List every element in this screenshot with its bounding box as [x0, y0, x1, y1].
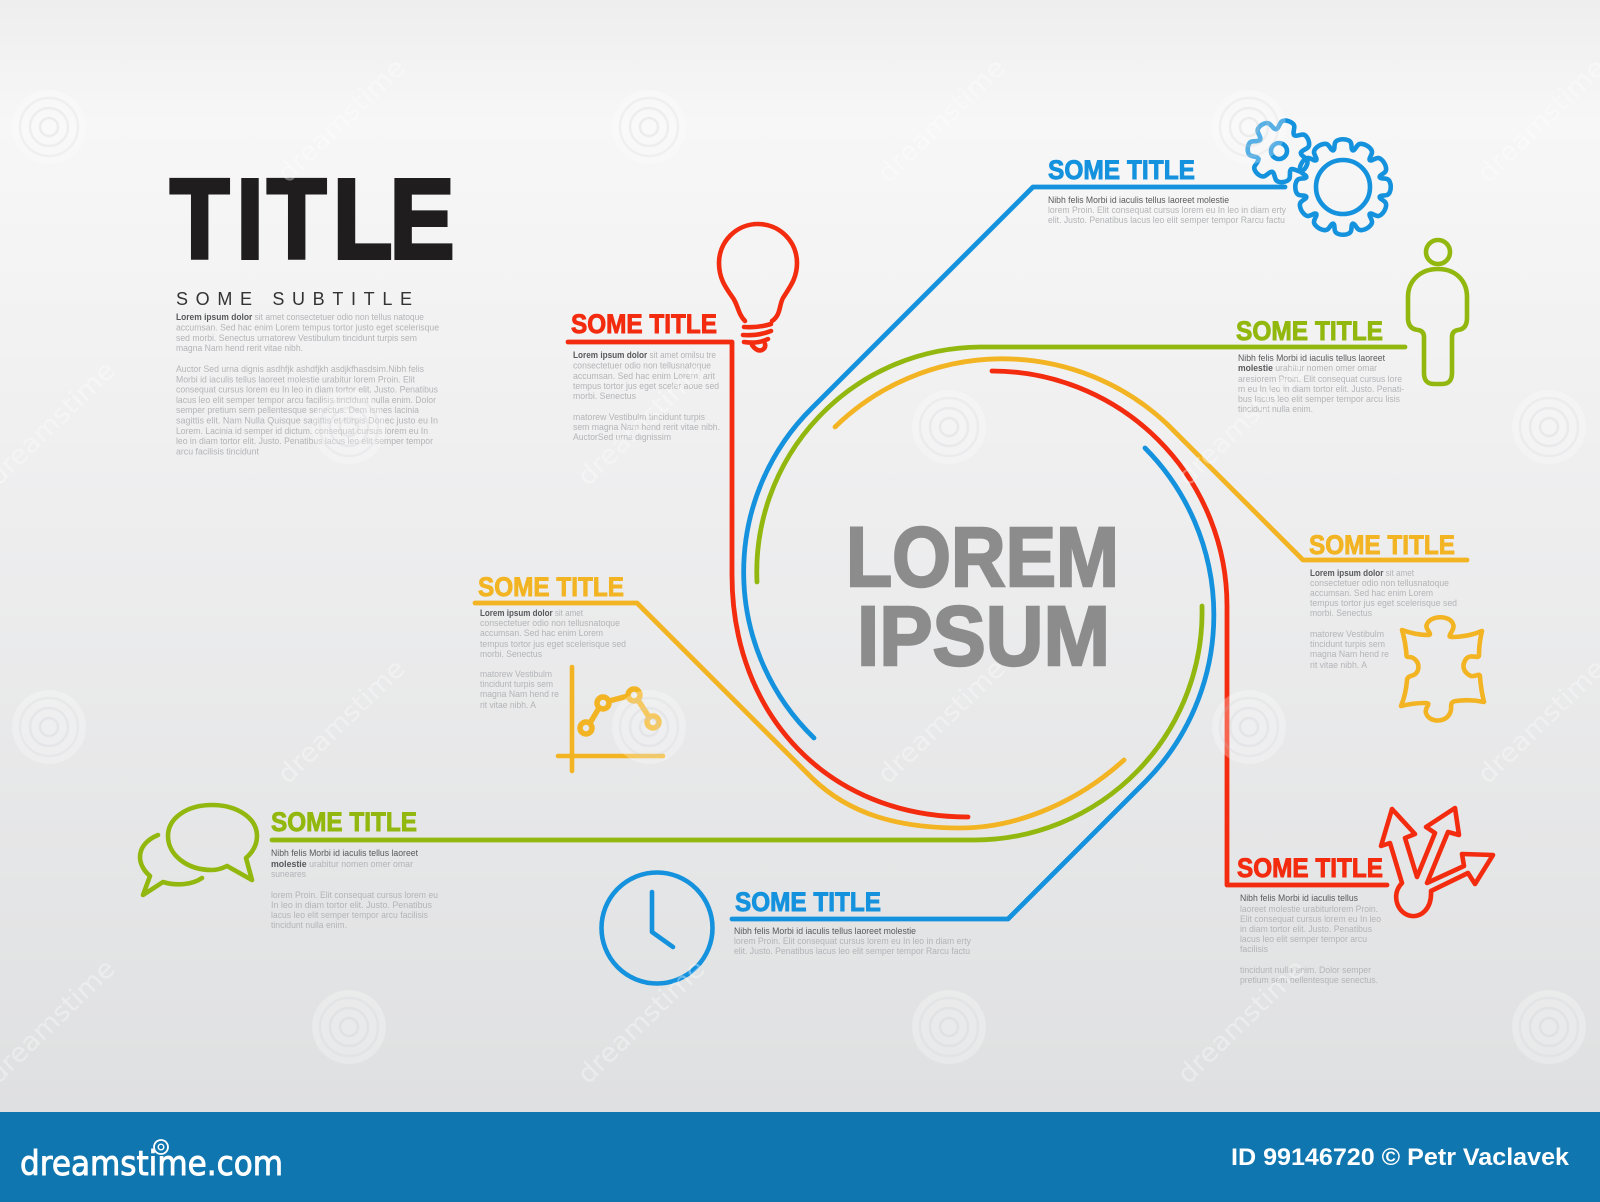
text block: tincidunt nulla enim. [271, 919, 347, 930]
text block: magna Nam hend re [480, 688, 559, 699]
text block: laoreet molestie urabiturlorem Proin. [1240, 903, 1378, 914]
text block: elit. Justo. Penatibus lacus leo elit semper tempor Rarcu factu [734, 945, 970, 956]
heading: SOME TITLE [478, 572, 624, 602]
text block: Nibh felis Morbi id iaculis tellus laoreet molestie [734, 925, 916, 936]
panel: yellow puzzle block [1309, 530, 1484, 720]
icon: light bulb [719, 224, 797, 350]
text block: accumsan. Sed hac enim Lorem [480, 627, 603, 638]
icon: speech bubbles [140, 805, 257, 895]
intro text: Auctor Sed urna dignis asdhfjk ashdfjkh asdjkfhasdsim.Nibh felis [176, 363, 424, 374]
intro text: sed morbi. Senectus urnatorew Vestibulum tincidunt turpis sem [176, 332, 417, 343]
text block: morbi. Senectus [573, 390, 636, 401]
text block: Lorem ipsum dolor sit amet omilsu tre [573, 349, 716, 360]
text block: lacus leo elit semper tempor arcu facilisis [271, 909, 428, 920]
watermark overlay: dreamstime [1172, 356, 1312, 492]
panel: blue clock block [602, 872, 971, 984]
text block: in diam tortor elit. Justo. Penatibus [1240, 923, 1372, 934]
heading: SOME TITLE [735, 887, 881, 917]
panel: green speech block [140, 805, 438, 930]
intro text: consequat cursus lorem eu In leo in diam tortor elit. Justo. Penatibus [176, 384, 438, 395]
icon: gears [1238, 111, 1391, 235]
text block [573, 349, 720, 442]
heading: SOME TITLE [271, 807, 417, 837]
text block: tincidunt turpis sem [1310, 638, 1385, 649]
central heading: LOREM [846, 510, 1119, 604]
text block: In leo in diam tortor elit. Justo. Penatibus [271, 899, 432, 910]
text block: molestie urabitur nomen omer omar [271, 858, 413, 869]
red line to bottom block [992, 371, 1387, 885]
green line to speech bubbles [272, 606, 1202, 840]
heading: SOME TITLE [1237, 853, 1383, 883]
heading: SOME TITLE [1236, 316, 1383, 346]
text block: tempus tortor jus eget scelerisque sed [480, 638, 626, 649]
text block: morbi. Senectus [480, 648, 542, 659]
footer logo: dreamstime.com [20, 1144, 283, 1184]
watermark overlay: dreamstime [572, 954, 712, 1090]
panel: green person block [1236, 240, 1467, 414]
icon: three arrows [1381, 808, 1493, 916]
text block: matorew Vestibulm tincidunt turpis [573, 411, 705, 422]
text block: tempus tortor jus eget sceler aoue sed [573, 380, 719, 391]
icon: puzzle piece [1401, 617, 1484, 720]
text block: rit vitae nibh. A [1310, 659, 1368, 670]
text block [271, 847, 438, 930]
text block: rit vitae nibh. A [480, 699, 537, 710]
intro text: leo in diam tortor elit. Justo. Penatibus lacus leo elit semper tempor [176, 435, 433, 446]
watermark overlay: dreamstime [1172, 954, 1312, 1090]
connector lines and centre circle [272, 187, 1467, 919]
intro text: lacus leo elit semper tempor arcu facilisis tincidunt nulla enim. Dolor [176, 394, 436, 405]
text block: consectetuer odio non tellusnatoque [480, 617, 620, 628]
text block: accumsan. Sed hac enim Lorem [1310, 587, 1433, 598]
text block [480, 607, 626, 710]
text block: consectetuer odio non tellusnatoque [573, 360, 711, 370]
text block: matorew Vestibulm [1310, 628, 1384, 639]
text block: lorem Proin. Elit consequat cursus lorem eu [271, 889, 438, 900]
text block: aresiorem Proin. Elit consequat cursus lore [1238, 373, 1402, 384]
subtitle: SOME SUBTITLE [176, 289, 412, 309]
intro text: semper pretium sem pellentesque senectus. Dem ismes lacinia [176, 404, 420, 415]
text block: consectetuer odio non tellusnatoque [1310, 577, 1449, 588]
text block: magna Nam hend re [1310, 648, 1389, 659]
text block [1310, 567, 1457, 670]
panel: yellow chart block [478, 572, 663, 771]
watermark overlay: dreamstime [572, 356, 712, 492]
intro text: magna Nam hend rerit vitae nibh. [176, 342, 303, 353]
panel: blue gears block [1048, 111, 1391, 235]
intro text: Lorem. Lacinia id semper id dictum. consequat cursus lorem eu In [176, 425, 428, 436]
text block: tincidunt nulla enim. [1238, 403, 1313, 414]
text block: sem magna Nam hend rerit vitae nibh. [573, 421, 720, 432]
intro text: sagittis elit. Nam Nulla Quisque sagittis et turpis Donec justo eu In [176, 414, 438, 426]
red line from top block [568, 342, 968, 817]
text block: lorem Proin. Elit consequat cursus lorem eu In leo in diam erty [1048, 204, 1286, 215]
text block: Nibh felis Morbi id iaculis tellus [1240, 892, 1358, 903]
intro text: Morbi id iaculis tellus laoreet molestie urabitur lorem Proin. Elit [176, 373, 415, 384]
text block: Elit consequat cursus lorem eu In leo [1240, 913, 1381, 924]
text block: accumsan. Sed hac enim Lorem. arit [573, 370, 715, 381]
footer credit: ID 99146720 © Petr Vaclavek [1231, 1144, 1570, 1171]
central heading [846, 510, 1119, 683]
central heading: IPSUM [857, 589, 1110, 683]
heading: SOME TITLE [1048, 155, 1195, 185]
text block: Lorem ipsum dolor sit amet [480, 607, 583, 618]
text block [1238, 352, 1404, 414]
text block: tincidunt turpis sem [480, 678, 553, 689]
icon: person [1408, 240, 1467, 384]
panel: red arrows block [1237, 808, 1493, 985]
blue line to clock [732, 448, 1214, 919]
watermark overlay: dreamstime [872, 53, 1012, 189]
watermark overlay: dreamstime [872, 654, 1012, 790]
icon: line chart [558, 667, 663, 771]
watermark overlay: dreamstime [272, 654, 412, 790]
intro text: Lorem ipsum dolor sit amet consectetuer odio non tellus natoque [176, 311, 424, 322]
text block: elit. Justo. Penatibus lacus leo elit semper tempor Rarcu factu [1048, 214, 1285, 225]
yellow line to puzzle [835, 359, 1467, 560]
text block: tincidunt nulla enim. Dolor semper [1240, 964, 1371, 975]
text block: Nibh felis Morbi id iaculis tellus laoreet [271, 847, 418, 858]
title: TITLE [170, 157, 454, 283]
text block [734, 925, 971, 956]
text block: lacus leo elit semper tempor arcu [1240, 933, 1367, 944]
blue line to gears [744, 187, 1285, 738]
text block: Nibh felis Morbi id iaculis tellus laoreet molestie [1048, 194, 1229, 205]
text block: morbi. Senectus [1310, 607, 1372, 618]
text block: lorem Proin. Elit consequat cursus lorem eu In leo in diam erty [734, 935, 971, 946]
title block [170, 157, 454, 456]
text block: facilisis [1240, 943, 1268, 954]
green line to person [757, 347, 1405, 582]
intro text: accumsan. Sed hac enim Lorem tempus tortor justo eget scelerisque [176, 321, 439, 332]
text block: Nibh felis Morbi id iaculis tellus laoreet [1238, 352, 1385, 363]
text block: tempus tortor jus eget scelerisque sed [1310, 597, 1457, 608]
text block: bus lacus leo elit semper tempor arcu lisis [1238, 393, 1400, 404]
intro text [176, 311, 439, 456]
text block [1240, 892, 1381, 985]
intro text: arcu facilisis tincidunt [176, 445, 259, 456]
heading: SOME TITLE [1309, 530, 1455, 560]
text block: matorew Vestibulm [480, 668, 552, 679]
text block: pretium sem pellentesque senectus. [1240, 974, 1378, 985]
text block: m eu In leo in diam tortor elit. Justo. Penati- [1238, 383, 1404, 394]
icon: clock [602, 872, 712, 984]
text block [1048, 194, 1286, 225]
watermark overlay: dreamstime [272, 53, 412, 189]
panel: red idea block [571, 224, 797, 442]
footer bar [0, 1112, 1600, 1202]
yellow line to chart [475, 603, 1124, 828]
text block: Lorem ipsum dolor sit amet [1310, 567, 1414, 578]
text block: molestie urabitur nomen omer omar [1238, 362, 1377, 373]
text block: AuctorSed urna dignissim [573, 431, 671, 442]
heading: SOME TITLE [571, 309, 717, 339]
text block: suneares [271, 868, 306, 879]
